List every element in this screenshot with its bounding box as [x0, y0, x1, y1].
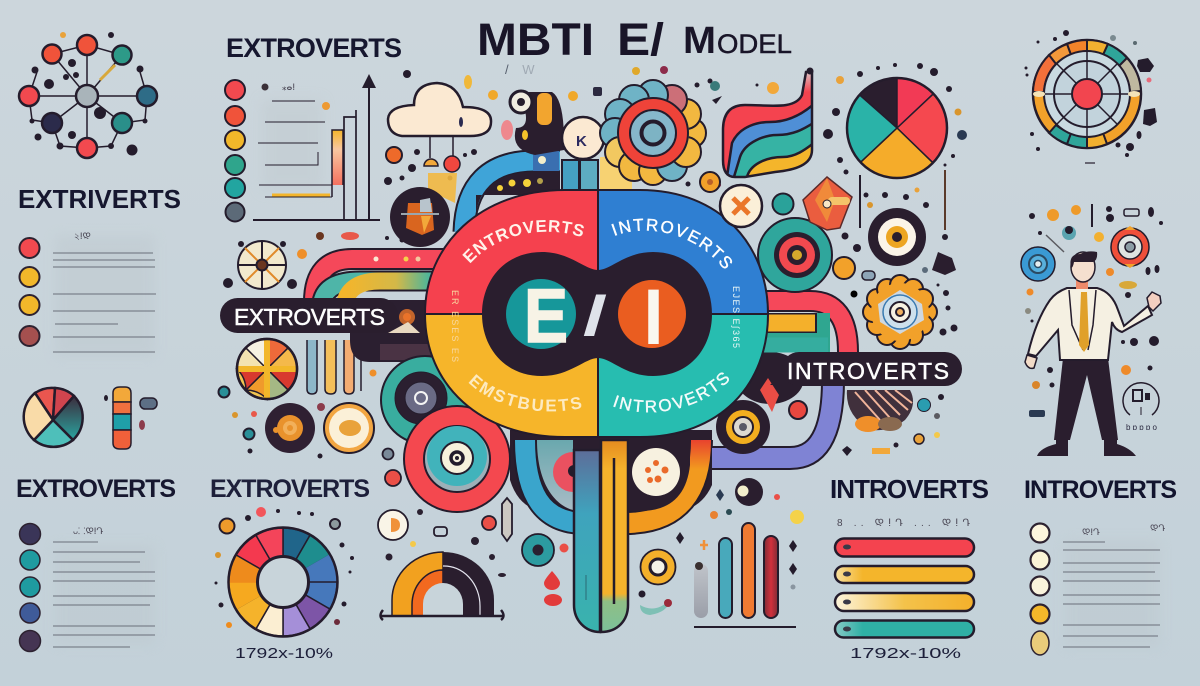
shoes: [1037, 440, 1136, 456]
red target icon: [1111, 226, 1149, 268]
colour wheel below pill: [237, 339, 297, 399]
person figure: [1021, 204, 1163, 456]
title: E/: [617, 14, 665, 65]
curved label: yellow: EMSTBUETS: [468, 374, 582, 412]
slash: /: [583, 284, 608, 347]
heading: extroverts top: EXTROVERTS: [226, 33, 402, 63]
pill label: extroverts: [220, 298, 398, 333]
list: six colored bullets and chart: [225, 74, 380, 222]
step bar chart: [253, 74, 380, 220]
list: left bullets and lines: ২ⵑᲓ: [74, 231, 91, 241]
hand left: [1025, 355, 1037, 368]
speech bubble: bɒɒɒo: [1126, 423, 1158, 432]
pie chart top right: [847, 78, 947, 178]
stacked bar left: [104, 387, 157, 449]
title: MBTI: [477, 14, 594, 65]
heading: extroverts above donut: EXTROVERTS: [210, 475, 370, 503]
quadrant: yellow: [425, 314, 598, 437]
dark icon circle left of disc: [390, 173, 457, 247]
title: / W: [505, 62, 535, 77]
yellow dot and pill: [833, 252, 956, 298]
trousers: [1054, 358, 1118, 440]
small side text right: EJES E∫365: [731, 286, 741, 348]
jacket: [1028, 288, 1152, 360]
cream circle with orange dots: [632, 448, 680, 496]
cream K badge: K: [576, 133, 587, 150]
target wheel top right: [1033, 40, 1141, 148]
progress bars: 8 .. ᲓⵑԴ ... ᲓⵑԴ: [837, 518, 970, 529]
curved label: teal: INTROVERTS: [613, 372, 729, 412]
central tubes: [574, 440, 628, 632]
curved label: red: ENTROVERTS: [462, 220, 584, 264]
list: introverts bullets and lines: [1030, 523, 1165, 655]
wheel icon: [223, 232, 389, 289]
teal target lower-left of disc: [381, 356, 469, 444]
letter I: I: [645, 275, 662, 360]
dark target lower right of disc: [716, 352, 807, 454]
dark inner with yellow dots: [476, 171, 560, 215]
list: introverts bullets and lines: ᲓⵑԴ: [1082, 527, 1100, 537]
quadrant: red: [425, 190, 598, 314]
letter circle E: [506, 279, 576, 349]
orange arc: [625, 440, 701, 523]
donut caption: 1792x-10%: [235, 645, 333, 662]
speech bubble: [1123, 383, 1159, 432]
star shape: [803, 177, 852, 230]
heading: extriverts left: EXTRIVERTS: [18, 184, 181, 214]
red petal shape: [760, 378, 779, 412]
lapels and tie: [1069, 290, 1096, 350]
title: ODEL: [717, 29, 792, 59]
title: [477, 14, 792, 77]
blue target icon: [1021, 247, 1055, 281]
dark hub left: [350, 300, 440, 362]
letter E: E: [524, 274, 568, 359]
heading: introverts list: INTROVERTS: [1024, 476, 1177, 504]
neck: [1076, 277, 1088, 289]
purple band: [712, 380, 833, 458]
list: left bullets and lines: [20, 231, 156, 357]
orange gear: [863, 275, 958, 349]
dot cluster near wheel: [218, 386, 325, 458]
mini bars: [307, 340, 376, 394]
heading: extroverts bottom left: EXTROVERTS: [16, 475, 176, 503]
red ring target: [404, 406, 510, 512]
cross circle: [720, 185, 762, 227]
pill label: extroverts: EXTROVERTS: [234, 304, 385, 330]
particles around pie: [823, 63, 967, 252]
title: M: [683, 20, 716, 62]
list: six colored bullets and chart: ⁎ⴰⵑ: [282, 82, 295, 92]
list: bottom left bullets and lines: [20, 524, 155, 652]
lower dark block: [510, 430, 712, 512]
small teal and orange dots: [700, 172, 794, 214]
top arch connector: [464, 161, 560, 232]
progress bars: [835, 518, 974, 638]
scattered particles top: [384, 66, 779, 242]
small pie chart left: [24, 388, 83, 447]
curved label: blue: INTROVERTS: [611, 218, 732, 268]
heading: introverts bars: INTROVERTS: [830, 474, 989, 504]
dark centre: [482, 252, 712, 376]
teal target right of disc: [758, 218, 832, 292]
pill label: introverts: [782, 352, 962, 386]
central disc: [424, 189, 769, 436]
icon: cream ring: [324, 403, 374, 453]
head: [1071, 252, 1095, 282]
connector pipes left: [314, 256, 460, 302]
network diagram top left: [19, 32, 157, 158]
small side text left: ER ESES ES: [450, 290, 460, 362]
donut chart: [228, 528, 338, 636]
arch chart: [380, 552, 504, 620]
upper rect strips: [533, 151, 632, 195]
connector pipes right: [750, 301, 850, 385]
icon: dark spiral circle: [265, 403, 315, 453]
list: introverts bullets and lines: ᲓԴ: [1150, 523, 1165, 533]
particles around target: [1024, 30, 1157, 164]
blue arc: [525, 440, 585, 523]
bars caption: 1792x-10%: [850, 645, 961, 662]
hatched blob: [842, 390, 944, 456]
letter circle I: [618, 280, 686, 348]
lower scatter icons: [378, 448, 676, 615]
donut decorations: [214, 507, 354, 628]
quadrant: blue: [598, 190, 768, 314]
cloud: [386, 83, 491, 172]
wave ribbon: [722, 68, 814, 178]
bird character: [501, 91, 564, 155]
small dark orb and sparks: [710, 478, 804, 524]
pill label: introverts: INTROVERTS: [787, 358, 949, 384]
right bars chart: [676, 523, 797, 627]
flower target: [600, 80, 706, 185]
inner dark area: [537, 430, 690, 511]
cream K badge: [562, 117, 604, 159]
particles around person: [1025, 204, 1163, 417]
hand right: [1147, 292, 1161, 311]
list: bottom left bullets and lines: ᴗ⸬ᲓⵑԴ: [73, 526, 103, 536]
quadrant: teal: [598, 314, 768, 437]
eye icon: [868, 208, 926, 266]
hair: [1070, 251, 1097, 268]
teal stub and red semicircle: [537, 440, 580, 510]
